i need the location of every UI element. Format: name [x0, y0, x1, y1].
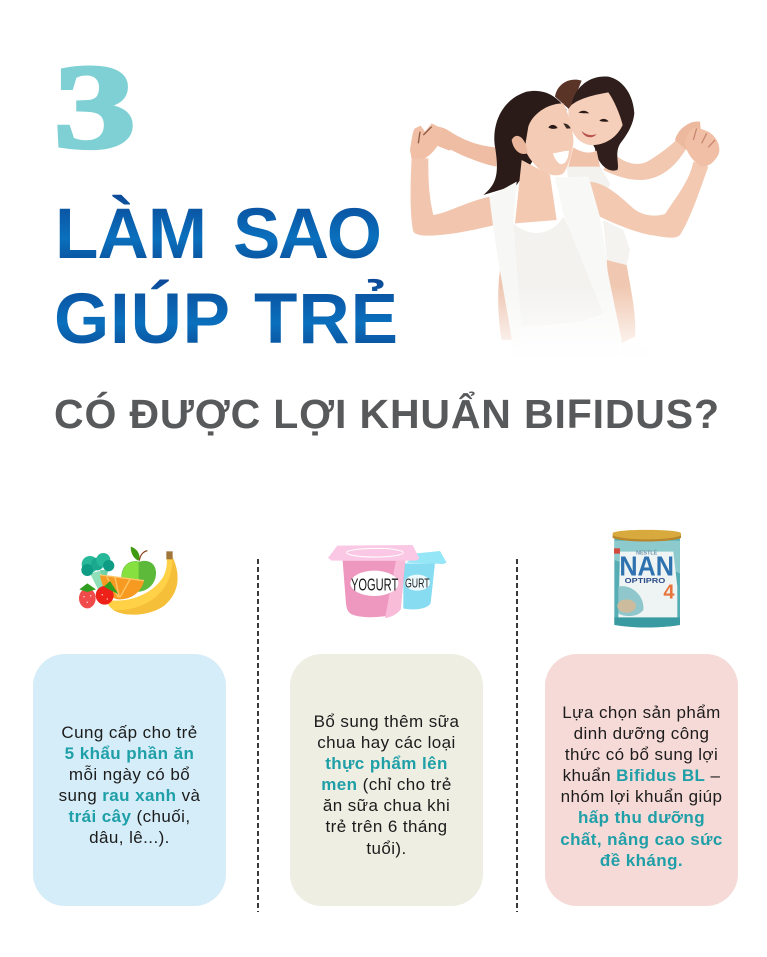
title: LÀM SAO GIÚP TRẺ: SAO	[233, 195, 382, 274]
icon: yogurt cups	[328, 545, 446, 618]
panel: fruit and vegetable advice: Cung cấp cho trẻ	[61, 723, 198, 742]
divider right	[516, 559, 518, 912]
panel: formula advice: chất, nâng cao sức	[560, 830, 723, 849]
icon: NAN Optipro 4 can: NESTLÉ	[636, 549, 658, 557]
numeral 3: 3	[54, 40, 136, 173]
panel: formula advice: nhóm lợi khuẩn giúp	[561, 787, 722, 806]
panel: fruit and vegetable advice	[33, 654, 226, 906]
icon: NAN Optipro 4 can: OPTIPRO	[625, 576, 665, 585]
panel: fruit and vegetable advice: sung rau xanh và	[59, 786, 200, 805]
panel: formula advice: khuẩn Bifidus BL –	[563, 766, 720, 785]
panel: fruit and vegetable advice: mỗi ngày có bổ	[69, 765, 190, 784]
panel: yogurt advice: tuổi).	[366, 839, 407, 858]
title: LÀM SAO GIÚP TRẺ	[54, 194, 398, 359]
icon: NAN Optipro 4 can: 4	[663, 582, 675, 604]
subtitle: CÓ ĐƯỢC LỢI KHUẨN BIFIDUS?	[54, 390, 719, 437]
icon: yogurt cups: YOGURT	[351, 575, 399, 595]
panel: formula advice: hấp thu dưỡng	[578, 808, 705, 827]
photo: mother and daughter	[410, 76, 720, 343]
panel: formula advice	[545, 654, 738, 906]
panel: fruit and vegetable advice: trái cây (chuối,	[68, 807, 190, 826]
panel: yogurt advice: ăn sữa chua khi	[323, 796, 450, 815]
panel: yogurt advice: thực phẩm lên	[325, 754, 448, 773]
icon: yogurt cups: GURT	[405, 576, 430, 591]
panel: yogurt advice: trẻ trên 6 tháng	[325, 817, 448, 836]
icon: NAN Optipro 4 can: NAN	[619, 550, 674, 581]
divider left	[257, 559, 258, 912]
panel: fruit and vegetable advice: dâu, lê...).	[89, 828, 170, 847]
panel: formula advice: dinh dưỡng công	[574, 724, 709, 743]
panel: yogurt advice: Bổ sung thêm sữa	[314, 712, 459, 731]
panel: formula advice: thức có bổ sung lợi	[565, 745, 718, 764]
panel: yogurt advice: chua hay các loại	[317, 733, 456, 752]
icon: NAN Optipro 4 can	[612, 530, 681, 628]
panel: yogurt advice	[290, 654, 483, 906]
title: LÀM SAO GIÚP TRẺ: GIÚP	[54, 280, 230, 359]
panel: formula advice: đề kháng.	[600, 851, 683, 870]
panel: fruit and vegetable advice: 5 khẩu phần ăn	[65, 744, 194, 763]
icon: fruit and vegetables	[79, 546, 178, 615]
title: LÀM SAO GIÚP TRẺ: LÀM	[55, 195, 207, 274]
panel: yogurt advice: men (chỉ cho trẻ	[321, 775, 452, 794]
panel: formula advice: Lựa chọn sản phẩm	[562, 703, 721, 722]
title: LÀM SAO GIÚP TRẺ: TRẺ	[254, 280, 398, 359]
